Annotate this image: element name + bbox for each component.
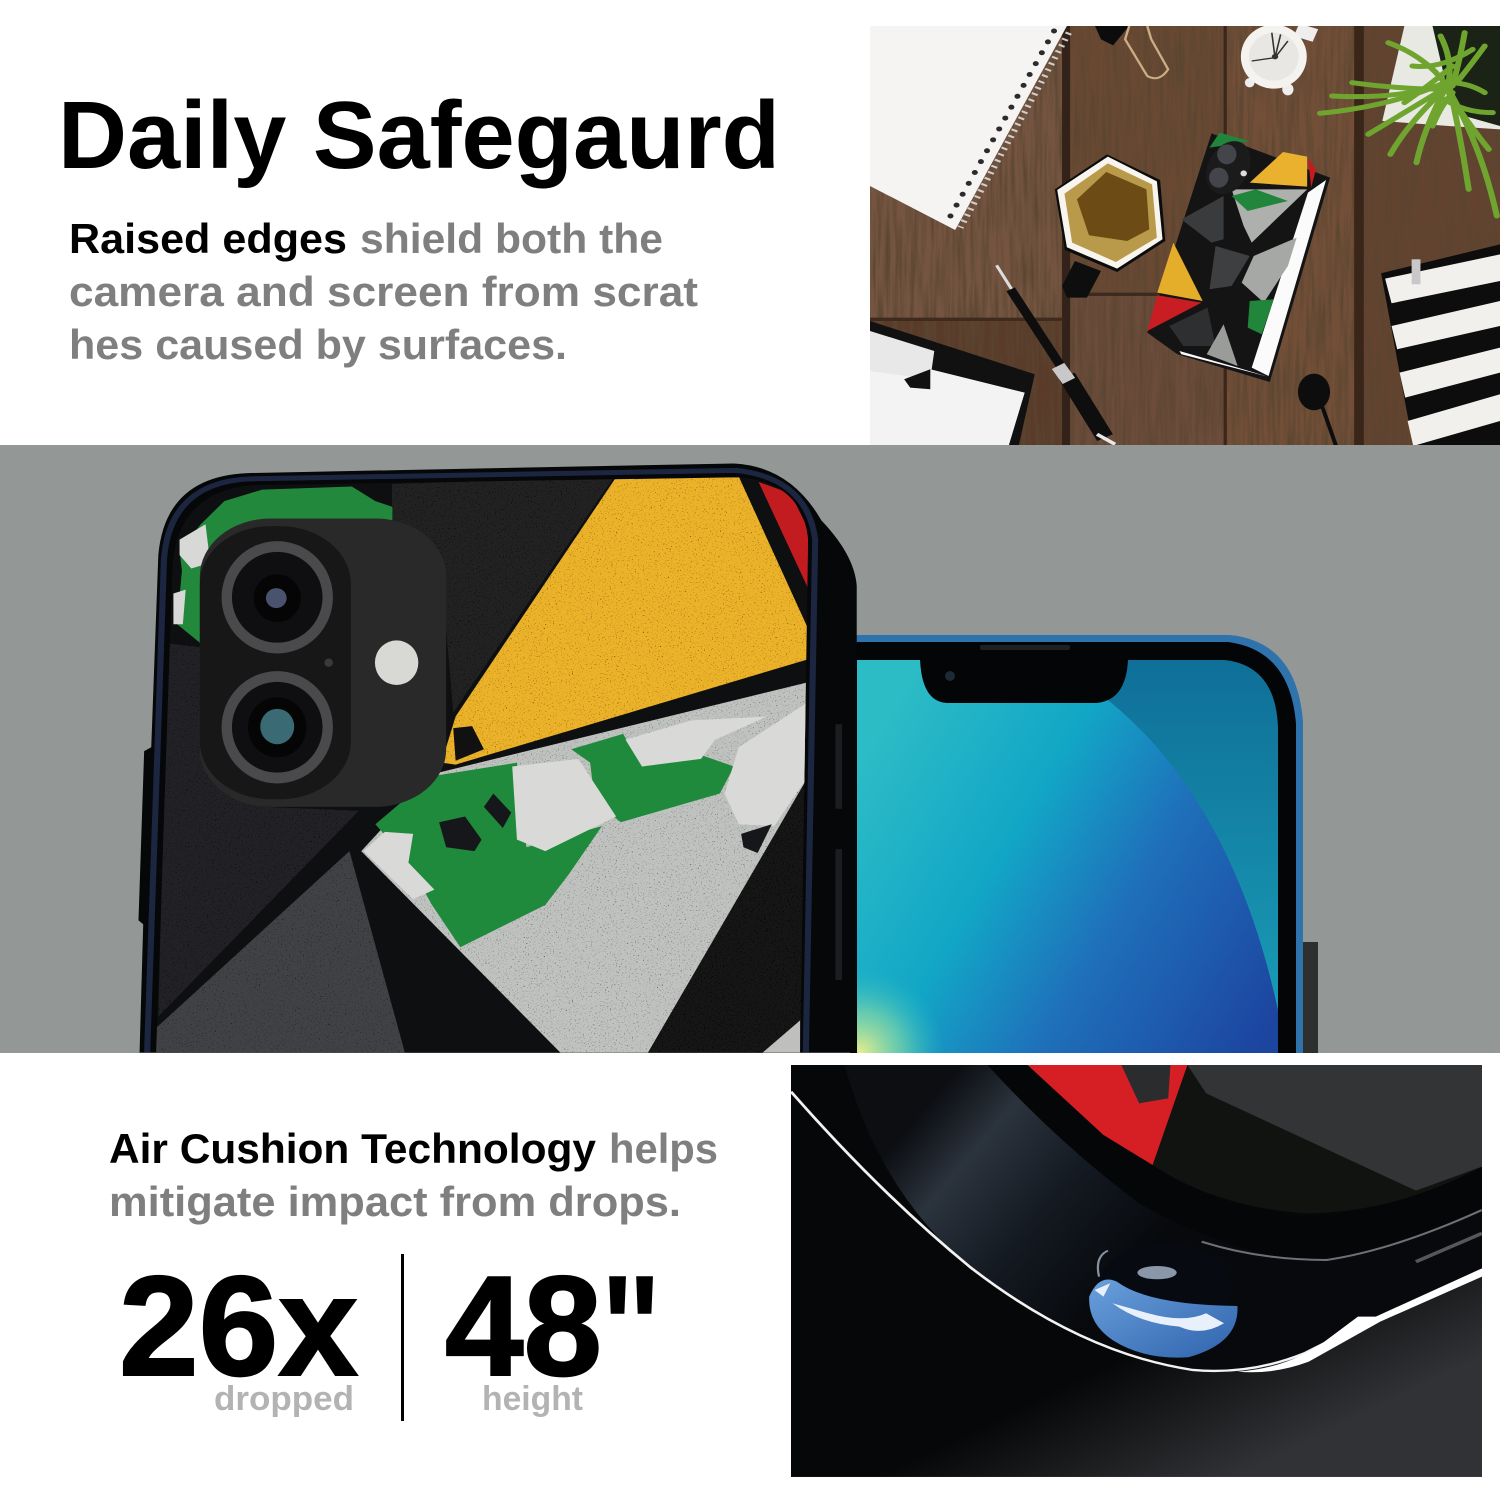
wood planks <box>870 26 1500 446</box>
yellow panel <box>441 477 810 765</box>
flash <box>375 640 418 685</box>
clipboard <box>870 321 1035 446</box>
plant in white pot <box>1320 26 1500 216</box>
stat: 48 inches height: height <box>482 1380 583 1418</box>
stat: 48 inches height: 48 <box>445 1247 602 1406</box>
text block: raised edges: camera and screen from scrat <box>69 268 698 315</box>
stat divider <box>401 1254 404 1421</box>
grey concrete panel <box>361 682 810 1059</box>
dark background <box>791 1065 1482 1477</box>
stat: 48 inches height <box>445 1247 658 1418</box>
large phone case with camera <box>138 463 857 1063</box>
microphone dot <box>324 658 333 667</box>
panel: close-up of case corner with water drop <box>791 1065 1482 1477</box>
text block: air cushion technology <box>109 1125 718 1225</box>
panel: lifestyle desk photo <box>870 24 1500 446</box>
text block: raised edges: shield both the <box>360 215 663 262</box>
camera module <box>200 518 446 807</box>
striped notebook <box>1381 244 1500 446</box>
top lens <box>222 541 333 653</box>
green paint <box>375 763 602 947</box>
front phone with notch <box>850 635 1318 1053</box>
text block: raised edges: Raised edges <box>69 215 347 262</box>
green top patch <box>177 487 392 643</box>
text block: air cushion technology: helps <box>609 1125 718 1172</box>
notebook <box>870 26 1069 230</box>
title: Daily Safegaurd <box>58 82 780 189</box>
speaker and lens <box>945 645 1070 681</box>
black bezel <box>850 642 1296 1053</box>
text block: air cushion technology: mitigate impact from drops. <box>109 1178 681 1225</box>
white edge highlight <box>791 1092 1482 1371</box>
bottom lens <box>222 671 333 783</box>
text block: raised edges: hes caused by surfaces. <box>69 321 567 368</box>
text block: air cushion technology: Air Cushion Technology <box>109 1125 597 1172</box>
charcoal panels <box>156 477 805 1057</box>
text block: raised edges <box>69 215 698 368</box>
white flakes <box>364 701 810 899</box>
case art inside <box>1028 1065 1482 1213</box>
black inner rim <box>988 1065 1182 1212</box>
case band <box>845 1065 1482 1371</box>
binder clip <box>1095 26 1168 78</box>
stat: 48 inches height: '' <box>604 1247 658 1406</box>
rim reflections <box>1202 1210 1482 1260</box>
bottom corner sliver <box>762 1020 800 1053</box>
alarm clock <box>1241 24 1318 95</box>
side buttons on right edge <box>835 724 842 980</box>
stat: 26x dropped: 26x <box>119 1247 358 1406</box>
red panel <box>759 482 810 592</box>
case body <box>138 463 857 1057</box>
navy frame <box>147 470 815 1057</box>
phone in case <box>1147 133 1330 382</box>
case artwork <box>149 470 819 1063</box>
blue frame <box>850 635 1303 1053</box>
water drop <box>1089 1243 1237 1358</box>
pen <box>997 265 1115 444</box>
side button <box>1303 942 1318 1053</box>
stat: 26x dropped: dropped <box>214 1380 354 1418</box>
screen <box>857 660 1278 1053</box>
paint holes <box>439 793 772 853</box>
spoon <box>1298 374 1336 446</box>
coffee cup <box>1055 154 1165 298</box>
panel: grey product band <box>0 445 1500 1053</box>
